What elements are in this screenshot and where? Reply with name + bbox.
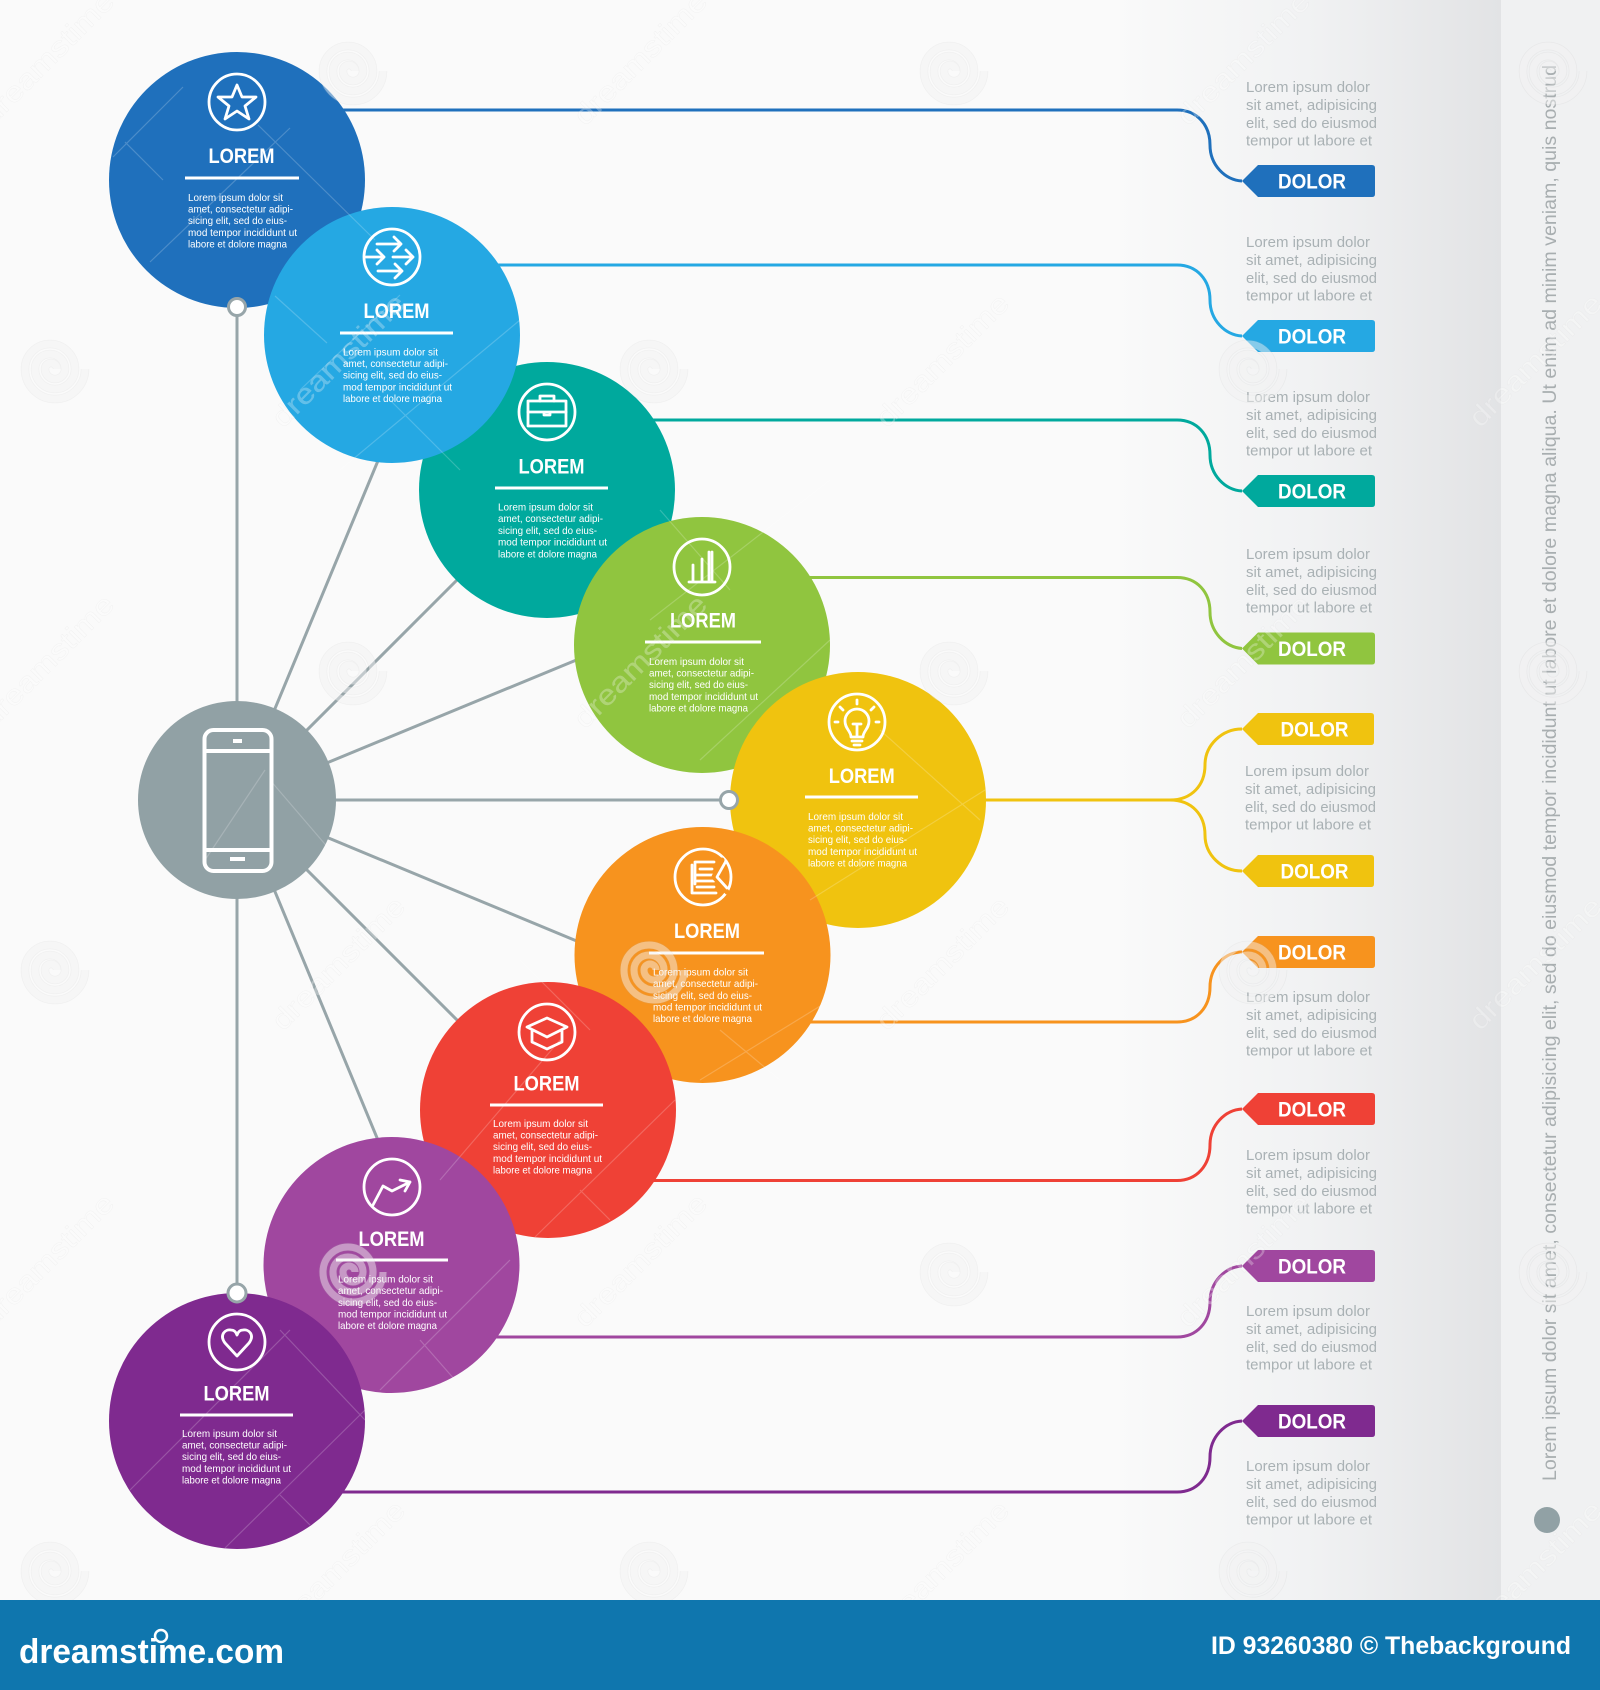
text block 5: Lorem ipsum dolor bbox=[1245, 764, 1369, 780]
text block: sicing elit, sed do eius- bbox=[493, 1141, 592, 1153]
footer logo: dreamstime.com bbox=[19, 1633, 284, 1671]
text block 5 bbox=[1245, 764, 1376, 834]
text block 9: tempor ut labore et bbox=[1246, 1513, 1372, 1529]
icon: heart bbox=[209, 1314, 265, 1370]
sidebar panel bbox=[1501, 0, 1600, 1600]
heading: LOREM bbox=[670, 610, 736, 632]
text block: sicing elit, sed do eius- bbox=[188, 215, 287, 227]
text block 8: tempor ut labore et bbox=[1246, 1358, 1372, 1374]
watermark text: dreamstime bbox=[265, 890, 411, 1036]
text block: labore et dolore magna bbox=[649, 703, 748, 715]
text block bbox=[493, 1118, 602, 1177]
text block 1: Lorem ipsum dolor bbox=[1246, 80, 1370, 96]
heading: LOREM bbox=[514, 1072, 580, 1096]
text block 5: sit amet, adipisicing bbox=[1245, 782, 1376, 798]
sidebar vertical text: Lorem ipsum dolor sit amet, consectetur adipisicing elit, sed do eiusmod tempor incididunt ut labore et dolore magna aliqua. Ut enim ad minim veniam, quis nostrud bbox=[1540, 65, 1561, 1481]
text block bbox=[653, 966, 762, 1025]
circle 7: graduation cap bbox=[420, 982, 676, 1238]
text block 9 bbox=[1246, 1459, 1377, 1529]
text block: labore et dolore magna bbox=[498, 548, 597, 560]
text block 2: Lorem ipsum dolor bbox=[1246, 235, 1370, 251]
heading: LOREM bbox=[829, 765, 895, 788]
logo spiral icon bbox=[155, 1630, 167, 1642]
watermark text: dreamstime bbox=[567, 0, 713, 131]
icon: arrows bbox=[364, 229, 420, 285]
text block: labore et dolore magna bbox=[182, 1475, 281, 1487]
text block: Lorem ipsum dolor sit bbox=[808, 811, 903, 823]
text block 2 bbox=[1246, 235, 1377, 305]
circle 6: document bbox=[574, 827, 830, 1083]
text block bbox=[808, 811, 917, 870]
tag 5a bbox=[1242, 713, 1374, 745]
text block: Lorem ipsum dolor sit bbox=[338, 1273, 433, 1285]
text block 4: tempor ut labore et bbox=[1246, 601, 1372, 617]
text block 2: sit amet, adipisicing bbox=[1246, 253, 1377, 269]
tag 8: DOLOR bbox=[1278, 1256, 1346, 1278]
text block: mod tempor incididunt ut bbox=[808, 846, 917, 858]
text block 8: Lorem ipsum dolor bbox=[1246, 1304, 1370, 1320]
circle 5: light bulb bbox=[730, 672, 986, 928]
connector node dots bbox=[228, 298, 738, 1302]
tag 4: DOLOR bbox=[1278, 638, 1346, 661]
watermark text: dreamstime bbox=[265, 287, 411, 433]
tag 7 bbox=[1242, 1093, 1375, 1125]
tag 5a: DOLOR bbox=[1280, 718, 1348, 742]
tag 7: DOLOR bbox=[1278, 1098, 1346, 1122]
watermark crossing lines bbox=[113, 87, 985, 1548]
circle 8: trend arrow bbox=[264, 1137, 520, 1393]
text block 2: tempor ut labore et bbox=[1246, 289, 1372, 305]
text block: Lorem ipsum dolor sit bbox=[493, 1118, 588, 1130]
text block 8: elit, sed do eiusmod bbox=[1246, 1340, 1377, 1356]
text block: Lorem ipsum dolor sit bbox=[182, 1428, 277, 1440]
right column: text and tags bbox=[1242, 80, 1377, 1529]
text block 7: Lorem ipsum dolor bbox=[1246, 1148, 1370, 1164]
text block 1: tempor ut labore et bbox=[1246, 134, 1372, 150]
icon: graduation cap bbox=[519, 1004, 575, 1060]
watermark text: dreamstime bbox=[265, 1494, 411, 1640]
text block: Lorem ipsum dolor sit bbox=[343, 346, 438, 358]
coloured connector curves bbox=[300, 110, 1242, 1492]
text block: Lorem ipsum dolor sit bbox=[653, 966, 748, 978]
heading: LOREM bbox=[518, 456, 584, 478]
text block 8: sit amet, adipisicing bbox=[1246, 1322, 1377, 1338]
text block: sicing elit, sed do eius- bbox=[649, 679, 748, 691]
tag 6: DOLOR bbox=[1278, 942, 1346, 964]
tag 5b: DOLOR bbox=[1280, 860, 1348, 884]
text block 1: sit amet, adipisicing bbox=[1246, 98, 1377, 114]
text block 4: elit, sed do eiusmod bbox=[1246, 583, 1377, 599]
circle 2: arrows bbox=[264, 207, 520, 463]
footer bar bbox=[0, 1600, 1600, 1690]
text block 5: elit, sed do eiusmod bbox=[1245, 800, 1376, 816]
text block: Lorem ipsum dolor sit bbox=[498, 502, 593, 514]
text block: labore et dolore magna bbox=[808, 858, 907, 870]
icon: star bbox=[209, 74, 265, 130]
tag 2: DOLOR bbox=[1278, 326, 1346, 348]
text block: amet, consectetur adipi- bbox=[182, 1440, 287, 1452]
text block 1 bbox=[1246, 80, 1377, 150]
text block: sicing elit, sed do eius- bbox=[808, 834, 907, 846]
text block: labore et dolore magna bbox=[338, 1320, 437, 1332]
text block 7 bbox=[1246, 1148, 1377, 1218]
text block bbox=[188, 192, 297, 251]
text block bbox=[338, 1273, 447, 1332]
text block: sicing elit, sed do eius- bbox=[338, 1297, 437, 1309]
watermark text: dreamstime bbox=[1462, 287, 1600, 433]
text block: amet, consectetur adipi- bbox=[498, 513, 603, 525]
text block: labore et dolore magna bbox=[493, 1165, 592, 1177]
hub connector lines bbox=[237, 307, 729, 1293]
text block: mod tempor incididunt ut bbox=[493, 1153, 602, 1165]
text block: mod tempor incididunt ut bbox=[188, 227, 297, 239]
text block 6 bbox=[1246, 990, 1377, 1060]
watermark text: dreamstime bbox=[1462, 890, 1600, 1036]
heading: LOREM bbox=[358, 1228, 424, 1251]
tag 3: DOLOR bbox=[1278, 480, 1346, 504]
text block: amet, consectetur adipi- bbox=[343, 358, 448, 370]
text block 1: elit, sed do eiusmod bbox=[1246, 116, 1377, 132]
circle 1: star bbox=[109, 52, 365, 308]
text block 7: sit amet, adipisicing bbox=[1246, 1166, 1377, 1182]
text block 8 bbox=[1246, 1304, 1377, 1374]
text block: mod tempor incididunt ut bbox=[343, 381, 452, 393]
tag 8 bbox=[1242, 1250, 1375, 1282]
icon: bar chart bbox=[674, 539, 730, 595]
text block 9: sit amet, adipisicing bbox=[1246, 1477, 1377, 1493]
text block 7: elit, sed do eiusmod bbox=[1246, 1184, 1377, 1200]
text block: mod tempor incididunt ut bbox=[338, 1308, 447, 1320]
text block: amet, consectetur adipi- bbox=[188, 204, 293, 216]
text block: amet, consectetur adipi- bbox=[493, 1130, 598, 1142]
text block 4: Lorem ipsum dolor bbox=[1246, 547, 1370, 563]
text block: mod tempor incididunt ut bbox=[649, 691, 758, 703]
tag 9 bbox=[1242, 1405, 1375, 1437]
heading: LOREM bbox=[674, 920, 740, 943]
watermark text: dreamstime bbox=[1170, 588, 1316, 734]
text block 6: tempor ut labore et bbox=[1246, 1044, 1372, 1060]
heading: LOREM bbox=[364, 300, 430, 323]
sidebar dot bbox=[1534, 1507, 1560, 1533]
circle 4: bar chart bbox=[574, 517, 830, 773]
text block: amet, consectetur adipi- bbox=[338, 1285, 443, 1297]
tag 2 bbox=[1242, 320, 1375, 352]
text block: mod tempor incididunt ut bbox=[653, 1002, 762, 1014]
tag 4 bbox=[1242, 632, 1375, 664]
watermark text: dreamstime bbox=[1170, 1187, 1316, 1333]
text block: sicing elit, sed do eius- bbox=[653, 990, 752, 1002]
text block 6: Lorem ipsum dolor bbox=[1246, 990, 1370, 1006]
heading: LOREM bbox=[208, 145, 274, 168]
text block 3: tempor ut labore et bbox=[1246, 444, 1372, 460]
text block bbox=[649, 656, 758, 715]
text block: amet, consectetur adipi- bbox=[808, 822, 913, 834]
text block: sicing elit, sed do eius- bbox=[182, 1451, 281, 1463]
watermark text: dreamstime bbox=[869, 1494, 1015, 1640]
text block: mod tempor incididunt ut bbox=[498, 537, 607, 549]
text block: sicing elit, sed do eius- bbox=[343, 370, 442, 382]
text block: amet, consectetur adipi- bbox=[649, 668, 754, 680]
tag 1: DOLOR bbox=[1278, 170, 1346, 194]
tag 5b bbox=[1242, 855, 1374, 887]
icon: light bulb bbox=[829, 694, 885, 750]
tag 6 bbox=[1242, 936, 1375, 968]
text block 5: tempor ut labore et bbox=[1245, 818, 1371, 834]
text block bbox=[498, 502, 607, 560]
watermark text: dreamstime bbox=[567, 588, 713, 734]
text block: mod tempor incididunt ut bbox=[182, 1463, 291, 1475]
text block: labore et dolore magna bbox=[653, 1013, 752, 1025]
text block: amet, consectetur adipi- bbox=[653, 978, 758, 990]
text block 3: elit, sed do eiusmod bbox=[1246, 426, 1377, 442]
central hub: phone bbox=[138, 701, 336, 899]
watermark text: dreamstime bbox=[567, 1187, 713, 1333]
text block 2: elit, sed do eiusmod bbox=[1246, 271, 1377, 287]
icon: trend arrow bbox=[364, 1159, 420, 1215]
text block 6: elit, sed do eiusmod bbox=[1246, 1026, 1377, 1042]
text block: Lorem ipsum dolor sit bbox=[188, 192, 283, 204]
text block 3: sit amet, adipisicing bbox=[1246, 408, 1377, 424]
watermark text: dreamstime bbox=[869, 287, 1015, 433]
text block: sicing elit, sed do eius- bbox=[498, 525, 597, 537]
text block 4: sit amet, adipisicing bbox=[1246, 565, 1377, 581]
tag 3 bbox=[1242, 475, 1375, 507]
watermark text: dreamstime bbox=[1462, 1494, 1600, 1640]
text block 3 bbox=[1246, 390, 1377, 460]
text block 4 bbox=[1246, 547, 1377, 617]
footer credit: ID 93260380 © Thebackground bbox=[1211, 1632, 1571, 1660]
circle 9: heart bbox=[109, 1293, 365, 1549]
icon: smartphone bbox=[204, 730, 272, 871]
text block 3: Lorem ipsum dolor bbox=[1246, 390, 1370, 406]
watermark text: dreamstime bbox=[869, 890, 1015, 1036]
text block bbox=[182, 1428, 291, 1487]
icon: document bbox=[675, 849, 731, 905]
heading: LOREM bbox=[204, 1382, 270, 1406]
icon: briefcase bbox=[519, 384, 575, 440]
text block bbox=[343, 346, 452, 405]
tag 9: DOLOR bbox=[1278, 1410, 1346, 1434]
text block 7: tempor ut labore et bbox=[1246, 1202, 1372, 1218]
text block 9: Lorem ipsum dolor bbox=[1246, 1459, 1370, 1475]
tag 1 bbox=[1242, 165, 1375, 197]
text block 6: sit amet, adipisicing bbox=[1246, 1008, 1377, 1024]
watermark text: dreamstime bbox=[1170, 0, 1316, 131]
text block: labore et dolore magna bbox=[188, 239, 287, 251]
text block 9: elit, sed do eiusmod bbox=[1246, 1495, 1377, 1511]
text block: labore et dolore magna bbox=[343, 393, 442, 405]
circle 3: briefcase bbox=[419, 362, 675, 618]
text block: Lorem ipsum dolor sit bbox=[649, 656, 744, 668]
